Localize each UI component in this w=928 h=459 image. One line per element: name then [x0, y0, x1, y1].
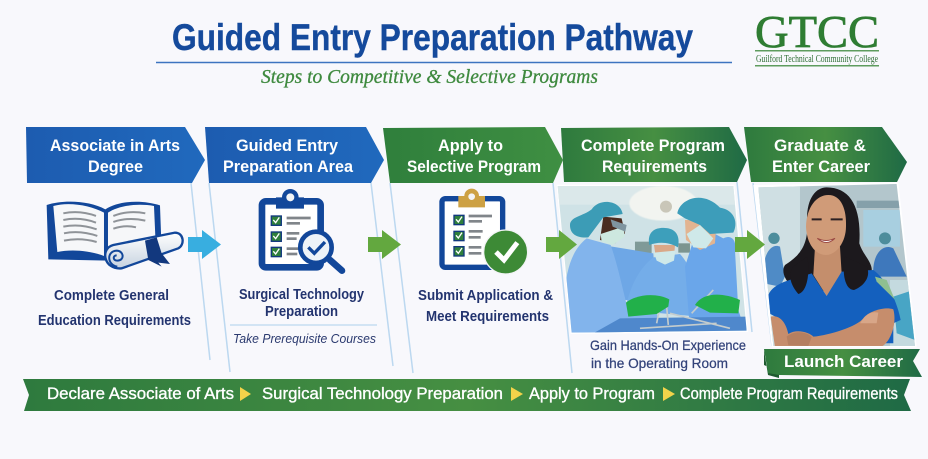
ribbon: Launch Career	[764, 349, 922, 378]
hair front locks	[790, 274, 808, 294]
divider lines	[191, 182, 772, 373]
banner: Guided Entry Preparation Area: Preparation Area	[223, 157, 354, 176]
icon: clipboard with magnifier	[262, 189, 342, 271]
banner: Associate in Arts Degree	[26, 127, 205, 183]
icon: clipboard with green check	[442, 189, 528, 274]
text: Complete General Education Requirements: Complete General	[54, 288, 169, 304]
logo: GTCC: GTCC	[755, 6, 879, 57]
face	[806, 195, 846, 255]
middle surgeon	[627, 254, 689, 316]
photo: graduate in blue scrubs	[753, 182, 917, 348]
arrow: blue step 1 to 2	[188, 230, 221, 259]
text: Submit Application and Meet Requirements: Meet Requirements	[426, 309, 549, 325]
ribbon: Launch Career: Launch Career	[784, 352, 903, 371]
left surgeon	[563, 238, 660, 334]
bottom ribbon: pathway summary: Apply to Program	[529, 385, 655, 403]
text: Surgical Technology Preparation: Preparation	[265, 304, 338, 320]
chevron 1	[240, 387, 251, 401]
text: Surgical Technology Preparation: Take Prerequisite Courses	[233, 331, 376, 346]
photo: surgical team in operating room	[557, 185, 750, 335]
bottom ribbon: pathway summary: Surgical Technology Preparation	[262, 385, 503, 403]
banner: Complete Program Requirements: Requirements	[602, 157, 707, 176]
text: Submit Application and Meet Requirements	[418, 288, 553, 325]
drape and instruments	[593, 317, 747, 333]
banner: Graduate and Enter Career	[744, 127, 907, 182]
title: Guided Entry Preparation Pathway	[172, 17, 693, 58]
text: Surgical Technology Preparation	[230, 287, 377, 346]
arrow: green step 4 to 5	[735, 230, 765, 259]
text: Gain Hands-On Experience: in the Operating Room	[591, 355, 728, 371]
right surgeon	[685, 234, 740, 318]
chevron 2	[511, 387, 523, 401]
banner: Apply to Selective Program: Selective Program	[407, 157, 541, 176]
arrow: green step 3 to 4	[546, 230, 577, 259]
neck	[813, 247, 842, 296]
banner: Complete Program Requirements	[561, 127, 747, 182]
banner: Apply to Selective Program: Apply to	[438, 136, 503, 155]
hair back	[783, 187, 872, 293]
banner: Graduate and Enter Career: Enter Career	[772, 157, 870, 176]
icon: open book and diploma	[47, 202, 183, 268]
gloves	[626, 295, 669, 317]
logo: GTCC: Guilford Technical Community College	[756, 54, 878, 65]
banner: Associate in Arts Degree: Degree	[88, 157, 143, 176]
bottom ribbon: pathway summary: Declare Associate of Arts	[47, 385, 234, 403]
back gown	[611, 246, 654, 300]
bottom ribbon: pathway summary: Complete Program Requirements	[680, 385, 898, 403]
arrow: green step 2 to 3	[368, 230, 401, 259]
banner: Complete Program Requirements: Complete Program	[581, 136, 725, 155]
scrubs	[768, 270, 901, 343]
arms	[771, 308, 894, 347]
text: Surgical Technology Preparation: Surgical Technology	[239, 287, 364, 303]
bottom ribbon: pathway summary	[23, 379, 911, 411]
banner: Graduate and Enter Career: Graduate &	[774, 136, 866, 155]
banner: Guided Entry Preparation Area	[205, 127, 384, 183]
chevron 3	[663, 387, 675, 401]
text: Complete General Education Requirements	[38, 288, 191, 329]
text: Complete General Education Requirements: Education Requirements	[38, 313, 191, 329]
text: Submit Application and Meet Requirements: Submit Application &	[418, 288, 553, 304]
subtitle: Steps to Competitive & Selective Programs	[261, 66, 598, 88]
text: Gain Hands-On Experience	[590, 337, 746, 371]
banner: Associate in Arts Degree: Associate in Arts	[50, 136, 180, 155]
banner: Apply to Selective Program	[383, 127, 563, 183]
banner: Guided Entry Preparation Area: Guided Entry	[236, 136, 339, 155]
text: Gain Hands-On Experience: Gain Hands-On Experience	[590, 337, 746, 353]
